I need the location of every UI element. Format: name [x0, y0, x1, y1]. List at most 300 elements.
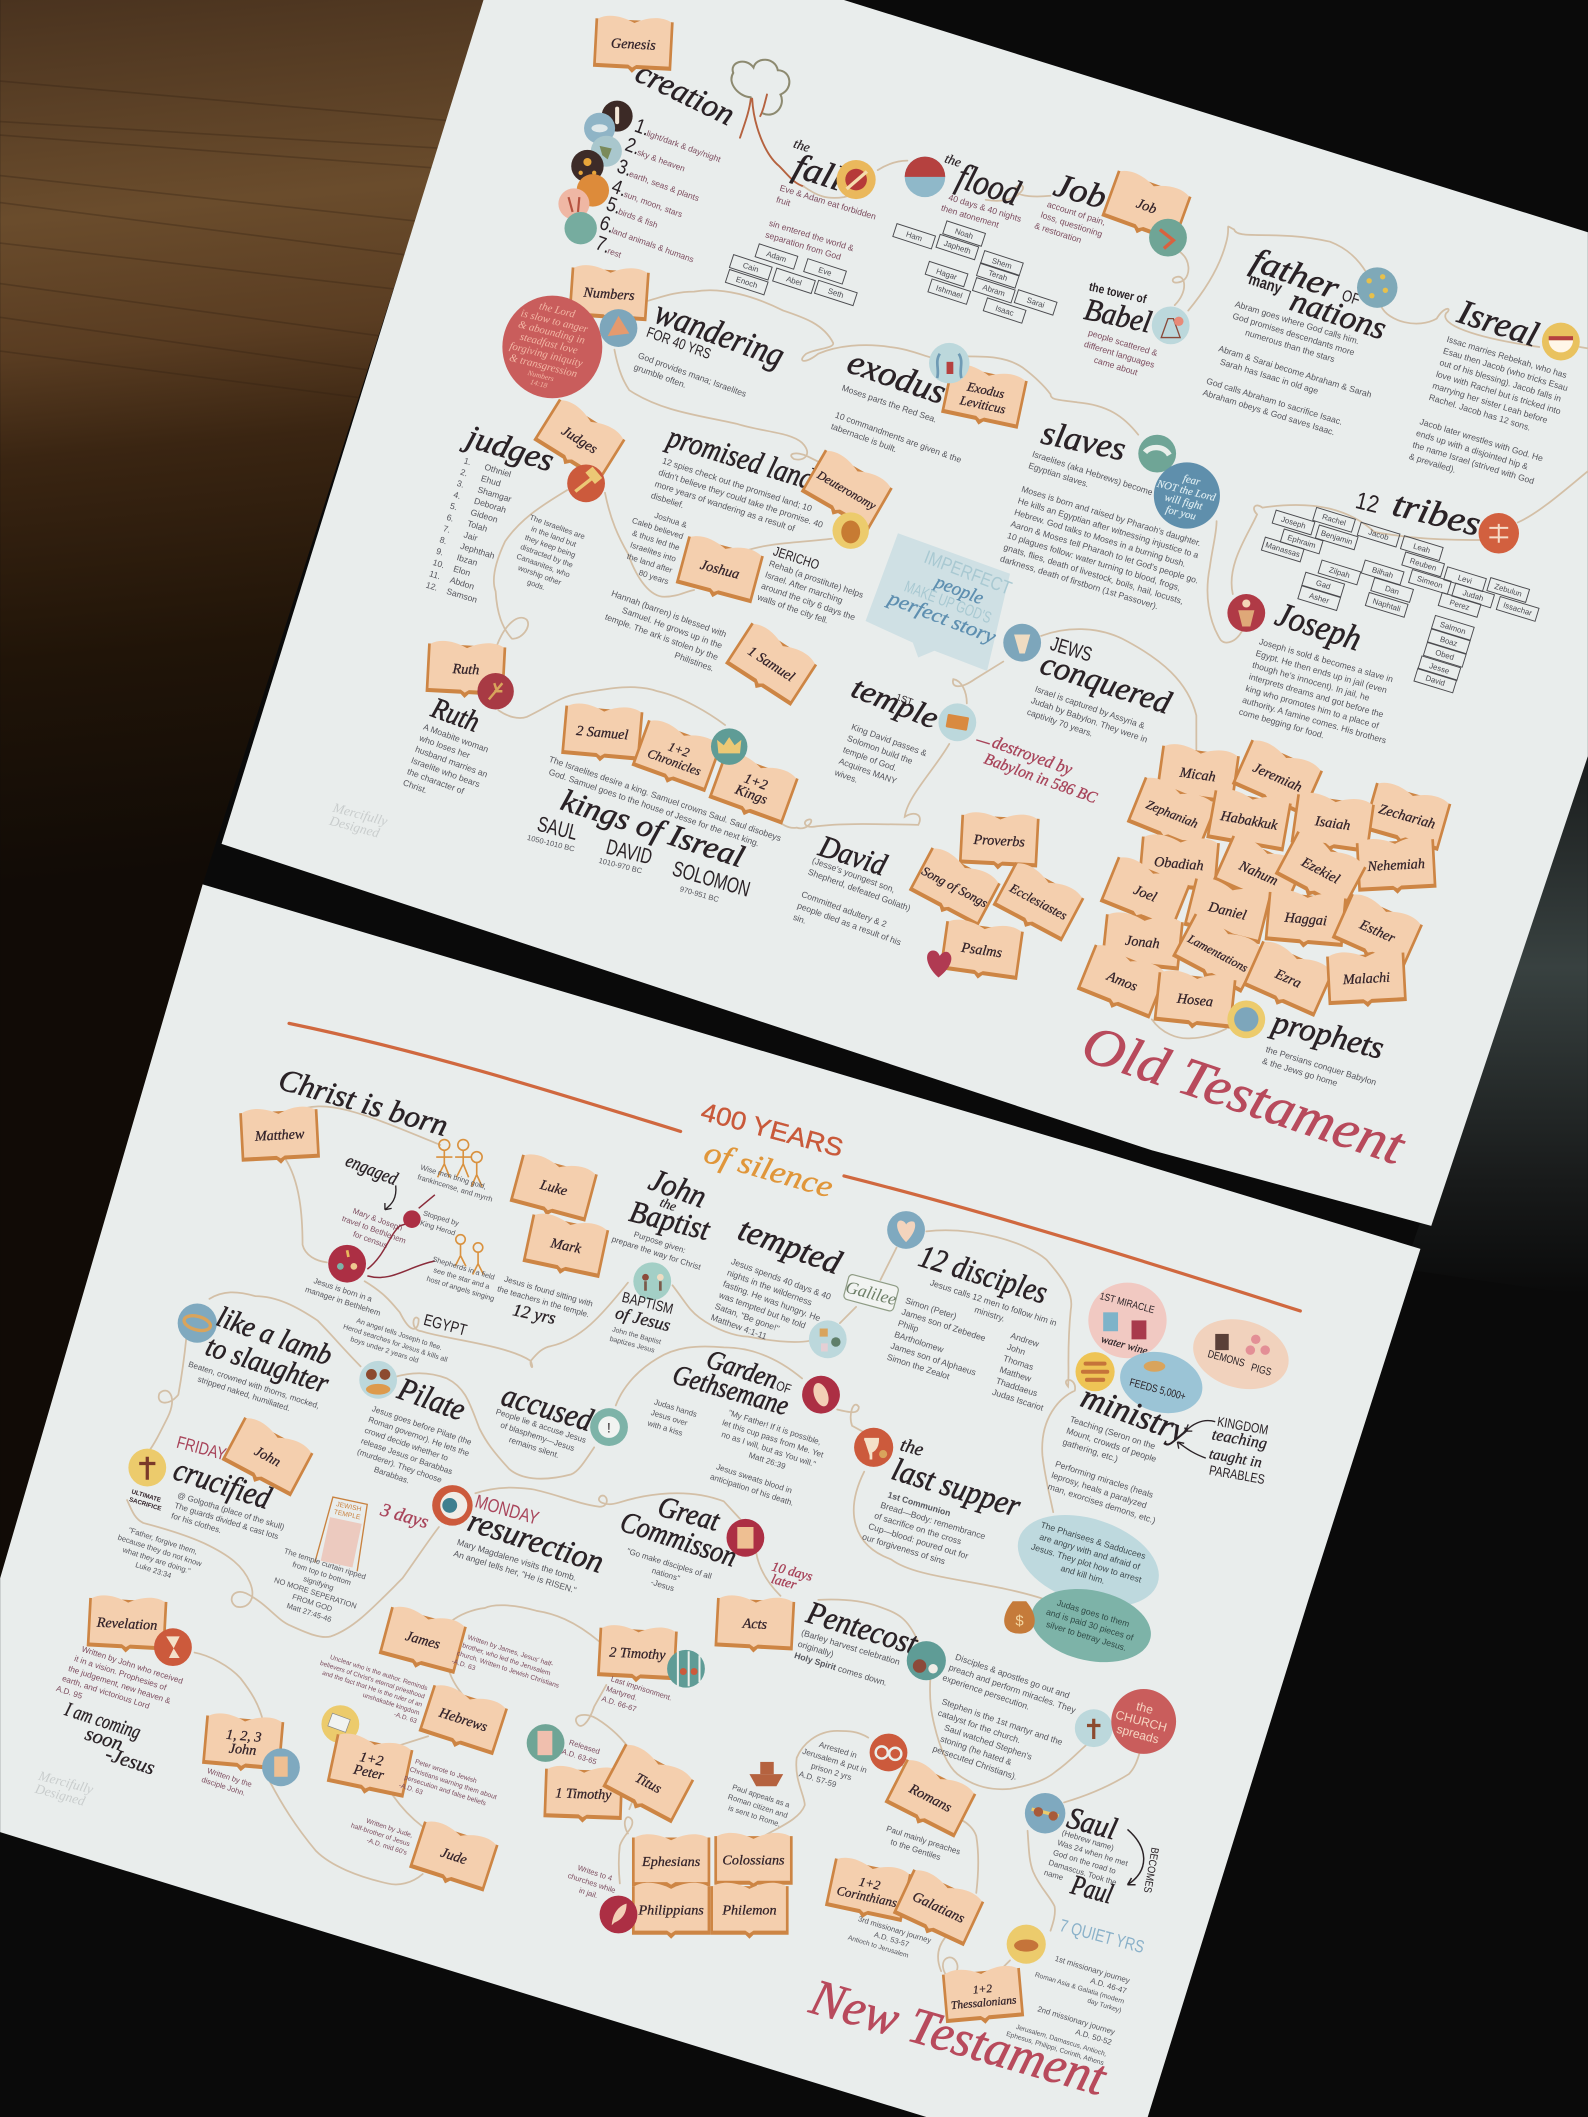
book: Exodus Leviticus: Leviticus	[958, 393, 1007, 417]
list: judges: Shamgar	[476, 484, 513, 504]
text: prophets: the Persians conquer Babylon	[1265, 1044, 1378, 1087]
text: sacrifice: Abraham obeys & God saves Isaac.	[1202, 387, 1336, 437]
family tree: tribes: Rachel	[1321, 512, 1347, 528]
text: temple at 12: the teachers in the temple.	[496, 1284, 590, 1319]
text: crucified: @ Golgotha (place of the skull)	[176, 1491, 286, 1532]
book: Judges	[531, 396, 627, 485]
text: temple curtain: FROM GOD	[291, 1592, 334, 1614]
text: temple curtain: NO MORE SEPERATION	[273, 1575, 358, 1611]
family tree: tribes: Perez	[1448, 598, 1471, 612]
text: day 6: 6.	[597, 211, 618, 237]
text: ministry teaching: gathering, etc.)	[1061, 1437, 1119, 1464]
book: 1 Timothy: 1 Timothy	[555, 1785, 612, 1803]
book: Galatians: Galatians	[910, 1889, 968, 1927]
king: David: 1010-970 BC	[598, 856, 644, 876]
prophets books: Haggai	[1283, 910, 1328, 929]
callout: Pharisees: The Pharisees & Sadducees	[1040, 1520, 1147, 1561]
book: Ephesians	[632, 1834, 710, 1890]
prophets books	[1075, 737, 1452, 1033]
heading: promised land: promised land	[662, 418, 819, 497]
text: Joseph: interprets dreams and got before the	[1248, 671, 1385, 719]
quote: I am coming soon: soon	[82, 1723, 125, 1756]
note: engaged: engaged	[343, 1150, 401, 1190]
text: day 3: 3.	[614, 154, 636, 180]
text: Jericho: Israel. After marching	[764, 569, 844, 605]
heading: Garden of Gethsemane: OF	[774, 1378, 793, 1397]
book: Deuteronomy: Deuteronomy	[814, 467, 879, 513]
text: ministry teaching: Teaching (Seron on the	[1069, 1414, 1157, 1451]
book: Thessalonians: 1+2	[972, 1983, 993, 1997]
list: disciples right: Thaddaeus	[995, 1376, 1039, 1398]
book: 2 Timothy: 2 Timothy	[609, 1644, 667, 1663]
text: day 6	[597, 211, 699, 267]
text: arrested: Arrested in	[818, 1740, 858, 1760]
heading: Monday resurection: MONDAY	[473, 1491, 542, 1529]
heading: Garden of Gethsemane: Gethsemane	[669, 1359, 792, 1422]
text: James: Written by James, Jesus' half-	[467, 1634, 554, 1669]
book: Ruth	[425, 640, 506, 700]
text: Pentecost: originally)	[797, 1639, 835, 1659]
text: sweats blood: anticipation of his death.	[709, 1472, 795, 1508]
text: Peter: -A.D. 63	[398, 1782, 424, 1797]
book: Hebrews	[417, 1682, 509, 1759]
list: judges: 7.	[442, 523, 452, 535]
text: exodus: Moses parts the Red Sea.	[841, 383, 938, 425]
note: destroyed by Babylon	[976, 732, 1100, 807]
text: Jude: -A.D. mid 60's	[365, 1837, 408, 1857]
text: disciples go out: Disciples & apostles go out and	[954, 1652, 1071, 1700]
text: day 5	[604, 192, 663, 232]
heading: Friday crucified: FRIDAY	[174, 1433, 228, 1465]
callout: feeds 5000: FEEDS 5,000+	[1128, 1377, 1187, 1403]
text: Moses: gnats, flies, death of livestock, boils, hail, locusts,	[1002, 542, 1185, 606]
list: disciples left: Simon (Peter)	[904, 1295, 958, 1321]
list: disciples right: Judas Iscariot	[991, 1387, 1045, 1413]
label: Egypt: EGYPT	[422, 1312, 469, 1340]
heading: Friday crucified: crucified	[169, 1452, 276, 1517]
text: lamb: stripped naked, humiliated.	[197, 1375, 291, 1413]
text: Job: loss, questioning	[1040, 210, 1104, 239]
book: Peter: Peter	[351, 1761, 386, 1784]
family tree: Noah: Shem	[991, 256, 1013, 271]
text: Hannah: temple. The ark is stolen by the	[604, 612, 720, 662]
family tree: Adam: Eve	[817, 265, 833, 278]
text: Rome: Paul appeals as a	[731, 1782, 792, 1810]
text: temple at 12: Jesus is found sitting with	[503, 1275, 594, 1308]
text: Herod: Stopped by	[422, 1208, 460, 1228]
callout: slow to anger: & abounding in	[517, 318, 586, 347]
text: Israelites distracted: The Israelites are	[528, 513, 586, 541]
icon: hand	[802, 1376, 840, 1414]
text: Israelites distracted: they keep being	[524, 533, 577, 560]
text: day 3	[614, 154, 704, 205]
text: Mary and Joseph: Mary & Joseph	[352, 1206, 404, 1233]
callout: slow to anger: is slow to anger	[520, 307, 590, 336]
text: 2nd journey cities: Ephesus, Philippi, Corinth, Athens	[1005, 2031, 1105, 2067]
book: Corinthians	[824, 1855, 912, 1926]
text: crucified	[128, 1488, 286, 1552]
text: flood: 40 days & 40 nights	[947, 192, 1023, 224]
text: 2nd journey: 2nd missionary journey	[1036, 2004, 1116, 2037]
text: sin entered: sin entered the world &	[768, 218, 855, 253]
text: Jacob wrestles: the name Israel (strived with God	[1411, 440, 1536, 486]
book: Proverbs: Proverbs	[972, 832, 1026, 851]
text: Pilate: Jesus goes before Pilate (the	[371, 1404, 473, 1447]
family tree: tribes: Levi	[1457, 573, 1473, 586]
text: Revelation: A.D. 95	[55, 1684, 84, 1701]
callout: slow to anger: Numbers	[526, 368, 555, 383]
icons: seven days	[558, 101, 633, 244]
heading: slaves: slaves	[1038, 414, 1129, 468]
text: Jacob wrestles: ends up with a disjointed hip &	[1415, 428, 1530, 472]
text: Moses: He kills an Egyptian after witnessing injustice to a	[1017, 495, 1200, 560]
text: flee: Herod searches for Jesus & kills all	[342, 1324, 449, 1364]
family tree: tribes: Gad	[1315, 578, 1332, 591]
prophets books: Jonah	[1124, 933, 1160, 952]
icon: temple	[938, 703, 976, 741]
text: disciples go out: experience persecution.	[941, 1672, 1031, 1712]
icon: cross	[1075, 1709, 1113, 1747]
family tree: tribes: Issachar	[1502, 600, 1533, 618]
book: Hebrews: Hebrews	[436, 1704, 490, 1736]
text: shepherds: Shepherds in a field	[432, 1254, 496, 1282]
book: Psalms: Psalms	[959, 940, 1004, 961]
list: judges: Deborah	[473, 496, 508, 515]
prophets books: Obadiah	[1153, 854, 1204, 874]
book: Job	[1100, 167, 1193, 247]
text: born: manager in Bethlehem	[304, 1285, 382, 1318]
prophets books: Hosea	[1175, 991, 1214, 1010]
heading: Ruth: Ruth	[426, 692, 484, 739]
text: Abram: Abram goes where God calls him.	[1234, 299, 1360, 346]
icon: temple curtain	[315, 1496, 371, 1571]
title: New Testament: New Testament	[803, 1968, 1114, 2107]
callout: Pharisees: Jesus. They plot how to arrest	[1030, 1541, 1143, 1585]
text: conquered: captivity 70 years.	[1026, 707, 1094, 739]
text: Babel: different languages	[1083, 339, 1156, 370]
book: John	[220, 1414, 315, 1500]
text: wise men: Wise men bring gold,	[419, 1163, 487, 1191]
note: kingdom teaching	[1186, 1414, 1270, 1453]
text: Israelites distracted: worship other	[516, 563, 563, 587]
timeline lines: 400 years	[289, 1023, 1300, 1311]
heading: John the Baptist: John	[644, 1162, 711, 1215]
text: Joshua and Caleb: Joshua &	[653, 511, 689, 530]
list: judges: 10.	[432, 557, 446, 570]
note: kingdom teaching: KINGDOM	[1216, 1414, 1270, 1438]
king: Saul: SAUL	[535, 811, 580, 845]
list: judges: Jair	[463, 530, 479, 543]
icon: empty tomb	[432, 1485, 473, 1526]
text: Roman Asia: Roman Asia & Galatia (modern	[1034, 1972, 1125, 2006]
icon: baptism	[633, 1262, 671, 1300]
text: temple curtain: from top to bottom	[291, 1560, 352, 1587]
book: Jude	[408, 1818, 500, 1895]
list: judges: Samson	[445, 586, 479, 605]
text: Herod: King Herod	[419, 1218, 457, 1237]
family tree: tribes: Jesse	[1428, 661, 1450, 676]
book: 1 Timothy	[543, 1765, 623, 1824]
list: disciples left: Philip	[897, 1318, 920, 1334]
sheet paper	[0, 884, 1420, 2117]
text: released: A.D. 63-65	[561, 1747, 598, 1766]
icon: door	[527, 1724, 564, 1762]
quote: I am coming soon	[61, 1698, 158, 1780]
text: Jericho: Rehab (a prostitute) helps	[768, 558, 865, 600]
text: Pilate: crowd decide whether to	[363, 1426, 450, 1463]
book: Chronicles	[630, 717, 723, 796]
label: 7 quiet years: 7 QUIET YRS	[1057, 1917, 1146, 1957]
family tree: tribes: Asher	[1308, 591, 1331, 606]
list: judges: 9.	[435, 546, 445, 557]
text: temple: Acquires MANY	[838, 756, 898, 786]
text: sin entered: separation from God	[764, 229, 843, 262]
text: day 5: birds & fish	[617, 206, 660, 230]
text: wise men: frankincense, and myrrh	[416, 1172, 494, 1204]
icon: quill	[600, 1896, 637, 1933]
family tree: tribes: Joseph	[1280, 515, 1307, 531]
family tree: Adam: Seth	[827, 286, 845, 300]
text: day 6: land animals & humans	[610, 225, 695, 264]
heading: father of many nations: OF	[1339, 287, 1362, 309]
text: James: -A.D. 63	[450, 1658, 476, 1672]
text: day 2: 2.	[622, 133, 644, 159]
list: judges: Elon	[452, 563, 472, 578]
list: judges: 8.	[438, 535, 448, 546]
heading: tower of Babel: the tower of	[1088, 281, 1148, 307]
text: Babel: came about	[1093, 355, 1139, 378]
family tree: tribes: Dan	[1384, 584, 1400, 597]
callout: demons to pigs: PIGS	[1249, 1362, 1273, 1379]
text: Stephen: Saul watched Stephen's	[943, 1722, 1033, 1762]
callout: the church spreads: CHURCH	[1114, 1708, 1168, 1735]
text: last supper: our forgiveness of sins	[861, 1532, 947, 1566]
text: shepherds: host of angels singing	[426, 1274, 496, 1303]
book: Corinthians: Corinthians	[835, 1884, 898, 1910]
text: writes to churches: in jail.	[578, 1886, 599, 1900]
heading: judges: judges	[458, 418, 558, 479]
family tree: Noah: Noah	[954, 227, 974, 241]
text: temple: temple of God.	[842, 744, 898, 773]
family tree: Noah: Isaac	[994, 304, 1015, 318]
note: destroyed by Babylon: destroyed by	[990, 732, 1075, 779]
heading: wandering: wandering	[650, 292, 790, 375]
text: tempted: nights in the wilderness	[726, 1267, 813, 1307]
king: Saul	[526, 811, 580, 854]
callout: fear not: for you	[1164, 504, 1198, 523]
text: Rome: is sent to Rome.	[727, 1803, 782, 1829]
watermark: Designed	[33, 1781, 87, 1809]
banner: imperfect people: perfect story	[883, 586, 999, 648]
heading: 400 years of silence	[698, 1098, 846, 1204]
text: 2nd journey: A.D. 50-52	[1074, 2027, 1113, 2047]
prophets books: Joel	[1131, 882, 1159, 906]
text: 1st journey: 1st missionary journey	[1054, 1954, 1131, 1985]
text: great commission: nations"	[651, 1566, 681, 1583]
heading: baptism of Jesus: of Jesus	[613, 1302, 673, 1335]
text: Joshua and Caleb: Israelites into	[629, 540, 678, 564]
book: Thessalonians: Thessalonians	[950, 1994, 1017, 2012]
family tree: tribes: Boaz	[1439, 635, 1459, 648]
text: Revelation: earth, and victorious Lord	[61, 1674, 151, 1711]
prophets books: Zechariah	[1377, 801, 1437, 833]
icon: bread and fish	[1076, 1352, 1115, 1391]
note: destroyed by Babylon: Babylon in 586 BC	[982, 750, 1100, 807]
text: Joshua and Caleb: the land after	[626, 552, 674, 575]
text: Joseph: Joseph is sold & becomes a slave in	[1258, 636, 1394, 684]
text: day 7: 7.	[593, 231, 614, 257]
text: Joseph: come begging for food.	[1238, 706, 1325, 740]
text: miracles: leprosy, heals a paralyzed	[1050, 1470, 1148, 1510]
text: last supper: Bread—Body: remembrance	[879, 1500, 987, 1541]
heading: kings of Isreal: kings of Isreal	[557, 782, 749, 874]
text: purpose: Purpose given:	[633, 1230, 687, 1255]
text: Stephen: persecuted Christians).	[931, 1743, 1019, 1782]
icon: scroll	[262, 1748, 300, 1786]
icon: heart	[927, 950, 951, 977]
icon: manger	[328, 1245, 366, 1283]
icon: stars	[1357, 267, 1398, 308]
family tree: Noah: Abram	[981, 283, 1006, 298]
family tree: Adam: Cain	[742, 261, 760, 274]
heading: 12 disciples: 12 disciples	[915, 1238, 1052, 1311]
heading: the flood: the	[943, 151, 963, 170]
prophets books: Isaiah	[1313, 813, 1351, 834]
book: Job: Job	[1134, 196, 1159, 218]
text: accused: remains silent.	[508, 1435, 560, 1460]
text: sacrifice: God calls Abraham to sacrifice Isaac.	[1205, 376, 1344, 427]
prophets books: Nehemiah	[1366, 856, 1425, 875]
book: Philippians: Philippians	[637, 1902, 704, 1918]
heading: Jews conquered: JEWS	[1048, 632, 1095, 666]
book: 1,2,3 John	[202, 1712, 285, 1775]
heading: 1st temple: temple	[847, 669, 944, 736]
text: day 2	[622, 133, 690, 176]
icon: bible	[726, 1519, 764, 1557]
dot: Herod	[403, 1210, 421, 1228]
banner: imperfect people	[866, 533, 1017, 671]
callout: demons to pigs	[1185, 1309, 1297, 1399]
family tree: tribes: Simeon	[1416, 574, 1444, 590]
book: Colossians	[714, 1833, 793, 1889]
text: wandering: grumble often.	[633, 362, 688, 390]
text: miracles: Performing miracles (heals	[1054, 1459, 1155, 1500]
text: promised land: disbelief.	[650, 490, 685, 510]
text: disciples go out: preach and perform miracles. They	[948, 1662, 1078, 1715]
text: day 2: sky & heaven	[636, 147, 687, 174]
family tree: tribes	[1261, 507, 1539, 693]
icon: gavel	[567, 464, 605, 502]
list: disciples right: Andrew	[1009, 1330, 1041, 1349]
text: Jericho: around the city 6 days the	[760, 581, 857, 622]
text: day 7	[593, 231, 627, 262]
heading: the fall: fall	[789, 146, 848, 199]
heading: father of many nations	[1246, 241, 1391, 347]
text: Peter: persecution and false beliefs	[403, 1774, 487, 1808]
book: Numbers: Numbers	[582, 285, 636, 304]
icon: bowl	[1542, 323, 1580, 360]
text: last supper: 1st Communion	[887, 1490, 952, 1518]
icon: bread and stones	[809, 1320, 847, 1358]
family tree: Noah: Terah	[987, 268, 1009, 283]
list: judges: Jephthah	[459, 541, 496, 561]
text: flee: An angel tells Joseph to flee.	[355, 1318, 443, 1352]
text: slaves intro: Egyptian slaves.	[1027, 460, 1090, 489]
text: ministry teaching: Mount, crowds of people	[1065, 1425, 1158, 1464]
text: Ruth: husband marries an	[414, 744, 489, 779]
book: Song of Songs	[907, 844, 1002, 930]
heading: Paul: Paul	[1067, 1869, 1116, 1910]
text: kings: God. Samuel goes to the house of Jesse for the next king.	[547, 767, 761, 848]
text: Pilate: (murderer). They choose	[356, 1447, 443, 1485]
panel: Old Testament sheet	[222, 0, 1588, 1226]
text: Job: & restoration	[1033, 220, 1083, 245]
text: Ruth: Christ.	[402, 777, 429, 795]
heading: father of many nations: nations	[1286, 283, 1391, 347]
text: tempted: was tempted but he told	[717, 1289, 807, 1330]
text: Hebrews: believers of Christ's eternal priesthood	[319, 1660, 426, 1701]
text: Revelation: the judgement, new heaven &	[67, 1664, 172, 1706]
arrow: becomes: BECOMES	[1141, 1846, 1160, 1894]
icon: letters	[321, 1705, 359, 1743]
text: David	[792, 855, 916, 959]
book: Titus	[600, 1741, 696, 1827]
text: tempted: Matthew 4:1-11	[710, 1312, 768, 1342]
icon: cup	[854, 1428, 893, 1467]
heading: wandering: FOR 40 YRS	[644, 324, 713, 362]
callout: Judas: silver to betray Jesus.	[1045, 1619, 1128, 1653]
text: conquered: Israel is captured by Assyria &	[1034, 684, 1146, 731]
heading: like a lamb to slaughter: like a lamb	[212, 1301, 336, 1372]
text: forgive them: what they are doing."	[121, 1545, 192, 1576]
icon: honey	[832, 512, 869, 549]
text: Peter: Christians warning them about	[409, 1766, 498, 1801]
text: commandments: 10 commandments are given & the	[834, 410, 963, 465]
text: born: Jesus is born in a	[312, 1276, 374, 1304]
list: judges: 3.	[456, 478, 466, 490]
book: Peter	[326, 1731, 414, 1802]
book: 1 Samuel: 1 Samuel	[745, 643, 797, 685]
text: Babel: people scattered &	[1087, 327, 1159, 358]
list: judges: Ehud	[480, 473, 502, 489]
heading: 12 tribes: tribes	[1389, 484, 1485, 544]
text: Mary and Joseph: travel to Bethlehem	[341, 1214, 407, 1245]
icon: temple curtain: TEMPLE	[333, 1509, 361, 1521]
heading: John the Baptist	[626, 1162, 715, 1247]
list: disciples left: James son of Alphaeus	[889, 1340, 977, 1378]
book: 1,2,3 John: John	[228, 1741, 257, 1759]
text: crucified: The guards divided & cast lots	[173, 1501, 280, 1541]
text: my father: Matt 26:39	[748, 1451, 787, 1471]
text: Hebrews: -A.D. 63	[393, 1711, 418, 1725]
heading: 1st temple: 1ST	[894, 692, 914, 708]
text: slaves intro: Israelites (aka Hebrews) become	[1031, 449, 1154, 497]
heading: Pentecost: Pentecost	[802, 1594, 922, 1663]
book: Deuteronomy	[799, 447, 894, 534]
prophets books: Nahum	[1236, 858, 1280, 889]
icon: crown	[711, 728, 747, 765]
note: 10 days later: 10 days	[770, 1559, 814, 1584]
text: accused: People lie & accuse Jesus	[495, 1407, 587, 1445]
wisdom books	[907, 811, 1086, 984]
text: great commission: "Go make disciples of all	[626, 1547, 713, 1581]
text: promised land: more years of wandering as a result of	[654, 479, 797, 534]
prophets books: Malachi	[1341, 970, 1390, 988]
text: miracles: man, exorcises demons, etc.)	[1047, 1481, 1157, 1526]
callout: 1st miracle: 1ST MIRACLE	[1099, 1289, 1156, 1315]
text: 3rd journey: 3rd missionary journey	[857, 1914, 932, 1945]
king: Saul: 1050-1010 BC	[526, 833, 576, 854]
